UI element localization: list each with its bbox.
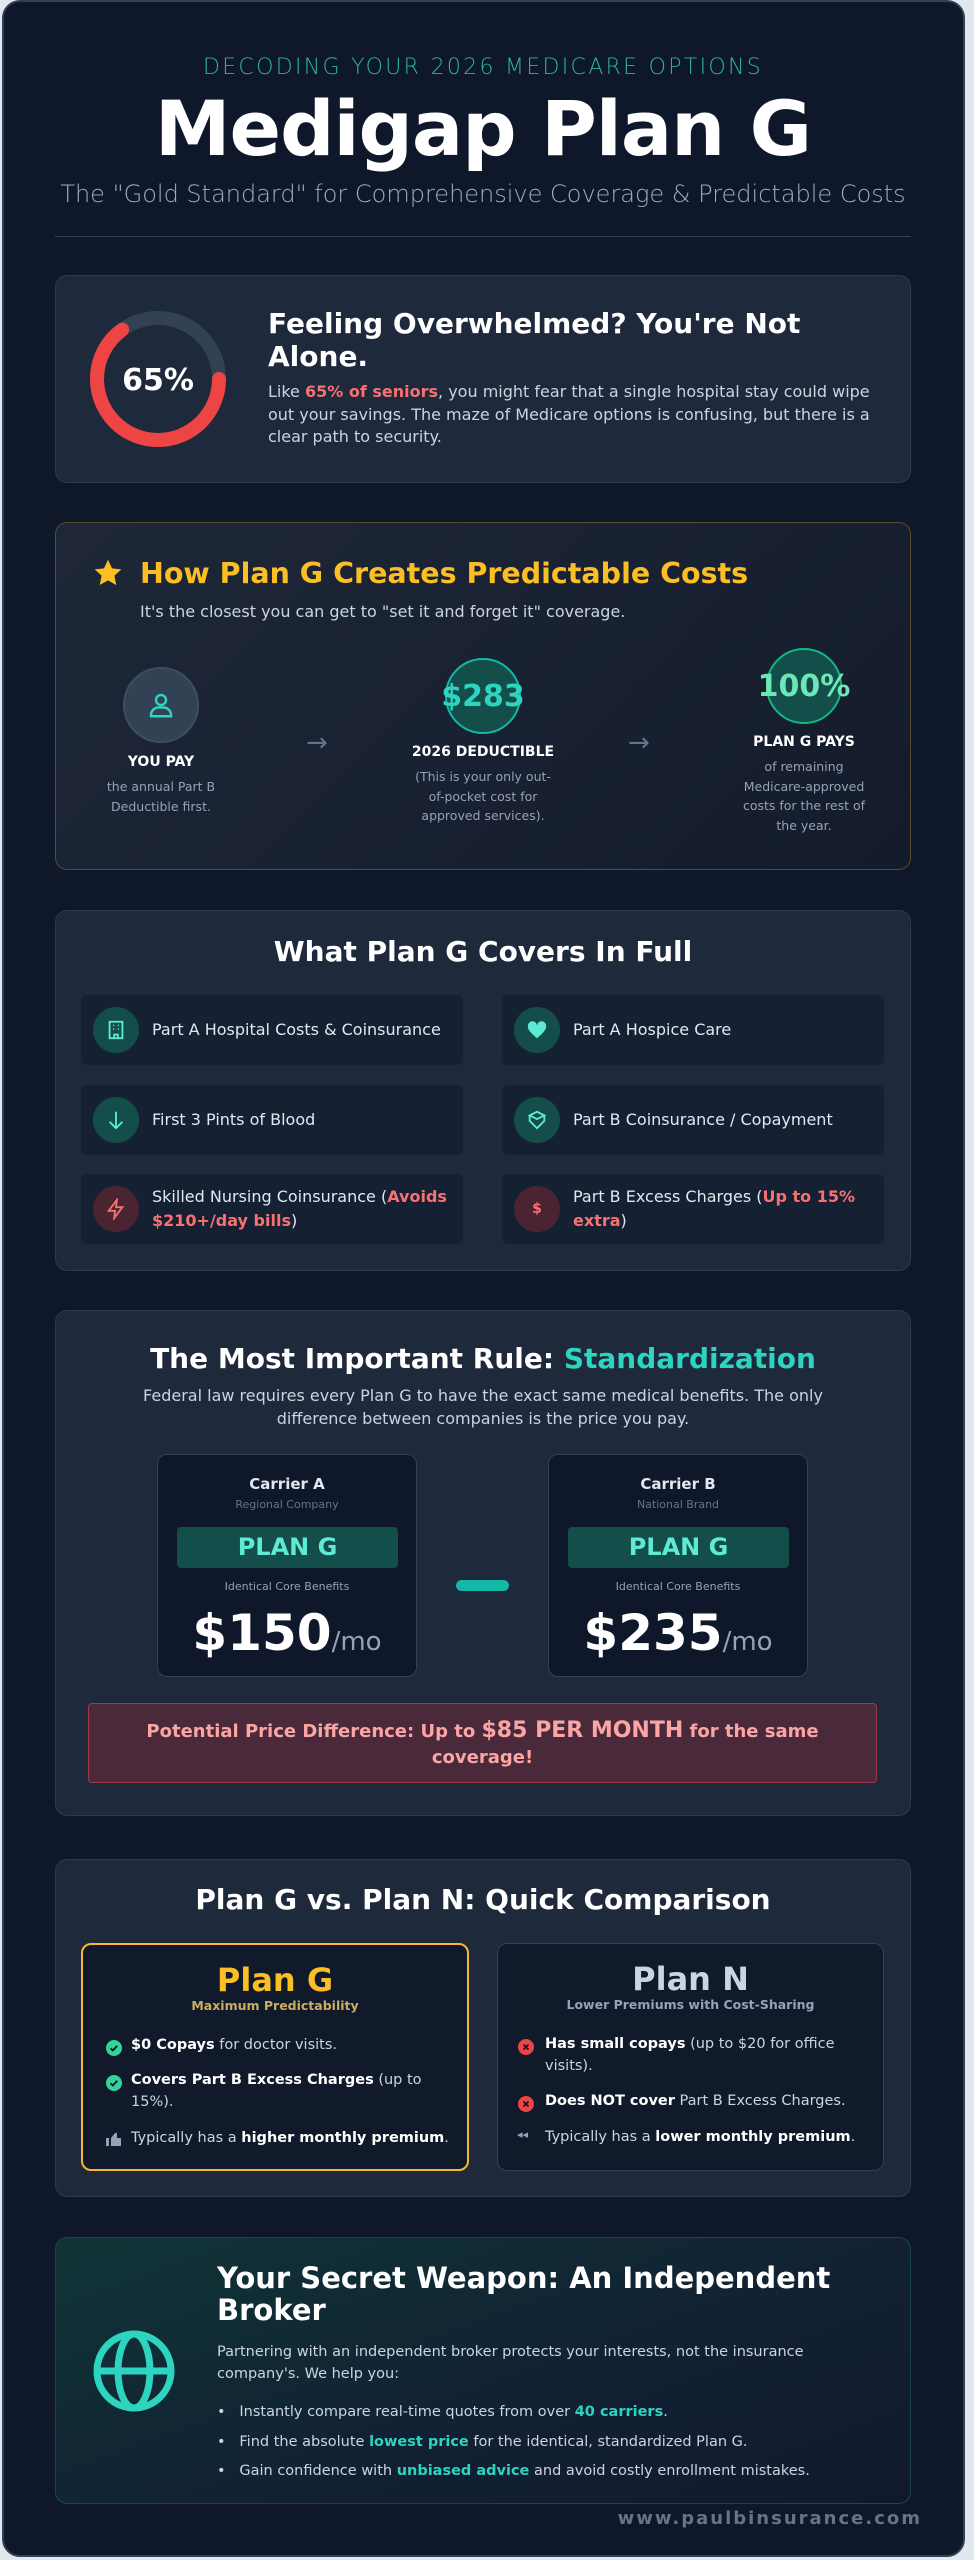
carrier A card: Identical Core Benefits [225,1580,349,1593]
step 1: YOU PAY [128,754,194,770]
title: Medigap Plan G [155,84,811,173]
item: excess charges: Part B Excess Charges (Up to 15% extra) [573,1187,855,1230]
bullet list: • Instantly compare real-time quotes from over 40 carriers. [217,2404,668,2420]
heading: What Plan G Covers In Full [274,935,692,968]
step 2: 2026 DEDUCTIBLE [412,744,554,760]
card: Plan N: Plan N [632,1960,749,1998]
heading: Plan G vs. Plan N: Quick Comparison [195,1883,771,1916]
card: Plan N: ◂◂ [517,2128,528,2141]
step 2: $283 [441,678,525,714]
step 1: the annual Part B [107,779,215,794]
paragraph: Partnering with an independent broker protects your interests, not the insurance company's. We help you: [217,2344,804,2382]
heading: The Most Important Rule: Standardization [150,1342,816,1375]
body text: Like 65% of seniors, you might fear that a single hospital stay could wipe out your savings. The maze of Medicare options is confusing, but there is a clear path to security. [268,382,870,446]
callout: price difference: Potential Price Difference: Up to $85 PER MONTH for the same [146,1718,819,1743]
donut chart 65%: 65% [122,363,194,398]
arrow: → [306,728,328,758]
item: hospice: Part A Hospice Care [573,1020,731,1039]
card: Plan G: Typically has a higher monthly premium. [131,2130,449,2146]
card: Plan N: Does NOT cover Part B Excess Charges. [545,2093,846,2109]
item: skilled nursing: Skilled Nursing Coinsurance (Avoids $210+/day bills) [152,1187,447,1230]
subtitle: The "Gold Standard" for Comprehensive Coverage & Predictable Costs [60,180,906,208]
icon: person [123,667,199,743]
paragraph: Federal law requires every Plan G to have the exact same medical benefits. The only [143,1386,823,1405]
paragraph: difference between companies is the price you pay. [277,1409,689,1428]
step 2 [412,658,554,823]
card: Plan G: $0 Copays for doctor visits. [131,2037,337,2053]
arrow: → [628,728,650,758]
card: Plan G: Plan G [217,1961,333,1999]
panel: covers in full [55,910,911,1271]
panel: broker [55,2237,911,2504]
panel: G vs N [55,1859,911,2197]
step 1 [107,667,215,814]
carrier A card: Regional Company [235,1498,339,1511]
footer url: www.paulbinsurance.com [618,2508,922,2529]
step 3: the year. [776,818,832,832]
callout: price difference: coverage! [432,1747,533,1768]
card: Plan G: Covers Part B Excess Charges (up to 15%). [131,2072,422,2110]
carrier B card: Carrier B [640,1475,716,1493]
carrier B card: National Brand [637,1498,719,1511]
panel: overwhelmed [55,275,911,483]
item: excess charges: $ [532,1201,542,1217]
item: part B coinsurance: Part B Coinsurance / Copayment [573,1110,833,1129]
item: blood [81,1085,463,1155]
carrier B card: PLAN G [629,1533,728,1561]
step 3: of remaining [764,759,844,774]
step 3: costs for the rest of [743,798,865,813]
kicker: DECODING YOUR 2026 MEDICARE OPTIONS [203,55,763,80]
step 2: approved services). [421,808,545,823]
step 3: 100% [758,668,850,704]
step 2: of-pocket cost for [429,788,537,804]
item: excess charges [502,1174,884,1244]
item: part B coinsurance [502,1085,884,1155]
dash connector [456,1580,509,1591]
card: Plan N: Lower Premiums with Cost-Sharing [566,1997,814,2012]
paragraph [143,1386,823,1428]
callout: price difference [88,1703,877,1783]
carrier A card: PLAN G [238,1533,337,1561]
card: Plan N: Has small copays (up to $20 for office visits). [545,2036,835,2074]
carrier A card: Carrier A [249,1475,325,1493]
panel: predictable costs [55,522,911,870]
item: hospital [81,995,463,1065]
carrier B card [548,1454,808,1677]
bullet list [217,2404,810,2479]
item: hospital: Part A Hospital Costs & Coinsurance [152,1020,441,1039]
step 3: Medicare-approved [744,778,864,794]
card: Plan N: Typically has a lower monthly premium. [545,2129,855,2145]
carrier A card: $150/mo [192,1604,382,1662]
card: Plan G: Maximum Predictability [191,1998,359,2013]
carrier B card: Identical Core Benefits [616,1580,740,1593]
card: Plan N [497,1943,884,2171]
donut chart 65% [90,311,226,447]
bullet list: • Find the absolute lowest price for the identical, standardized Plan G. [217,2434,747,2450]
icon: globe [94,2330,174,2412]
item: blood: First 3 Pints of Blood [152,1110,315,1129]
step 3: PLAN G PAYS [753,734,855,750]
heading: Your Secret Weapon: An Independent Broker [217,2261,830,2327]
step 1: Deductible first. [111,798,211,814]
item: hospice [502,995,884,1065]
step 2: (This is your only out- [415,769,551,784]
subheading: It's the closest you can get to "set it and forget it" coverage. [140,602,625,621]
heading: How Plan G Creates Predictable Costs [140,557,748,590]
bullet list: • Gain confidence with unbiased advice and avoid costly enrollment mistakes. [217,2463,810,2479]
card: Plan G [81,1943,469,2171]
icon: star [94,560,122,586]
item: skilled nursing [81,1174,463,1244]
step 3 [743,648,866,832]
panel: standardization [55,1310,911,1816]
heading: Feeling Overwhelmed? You're Not Alone. [268,307,800,373]
carrier A card [157,1454,417,1677]
carrier B card: $235/mo [583,1604,773,1662]
